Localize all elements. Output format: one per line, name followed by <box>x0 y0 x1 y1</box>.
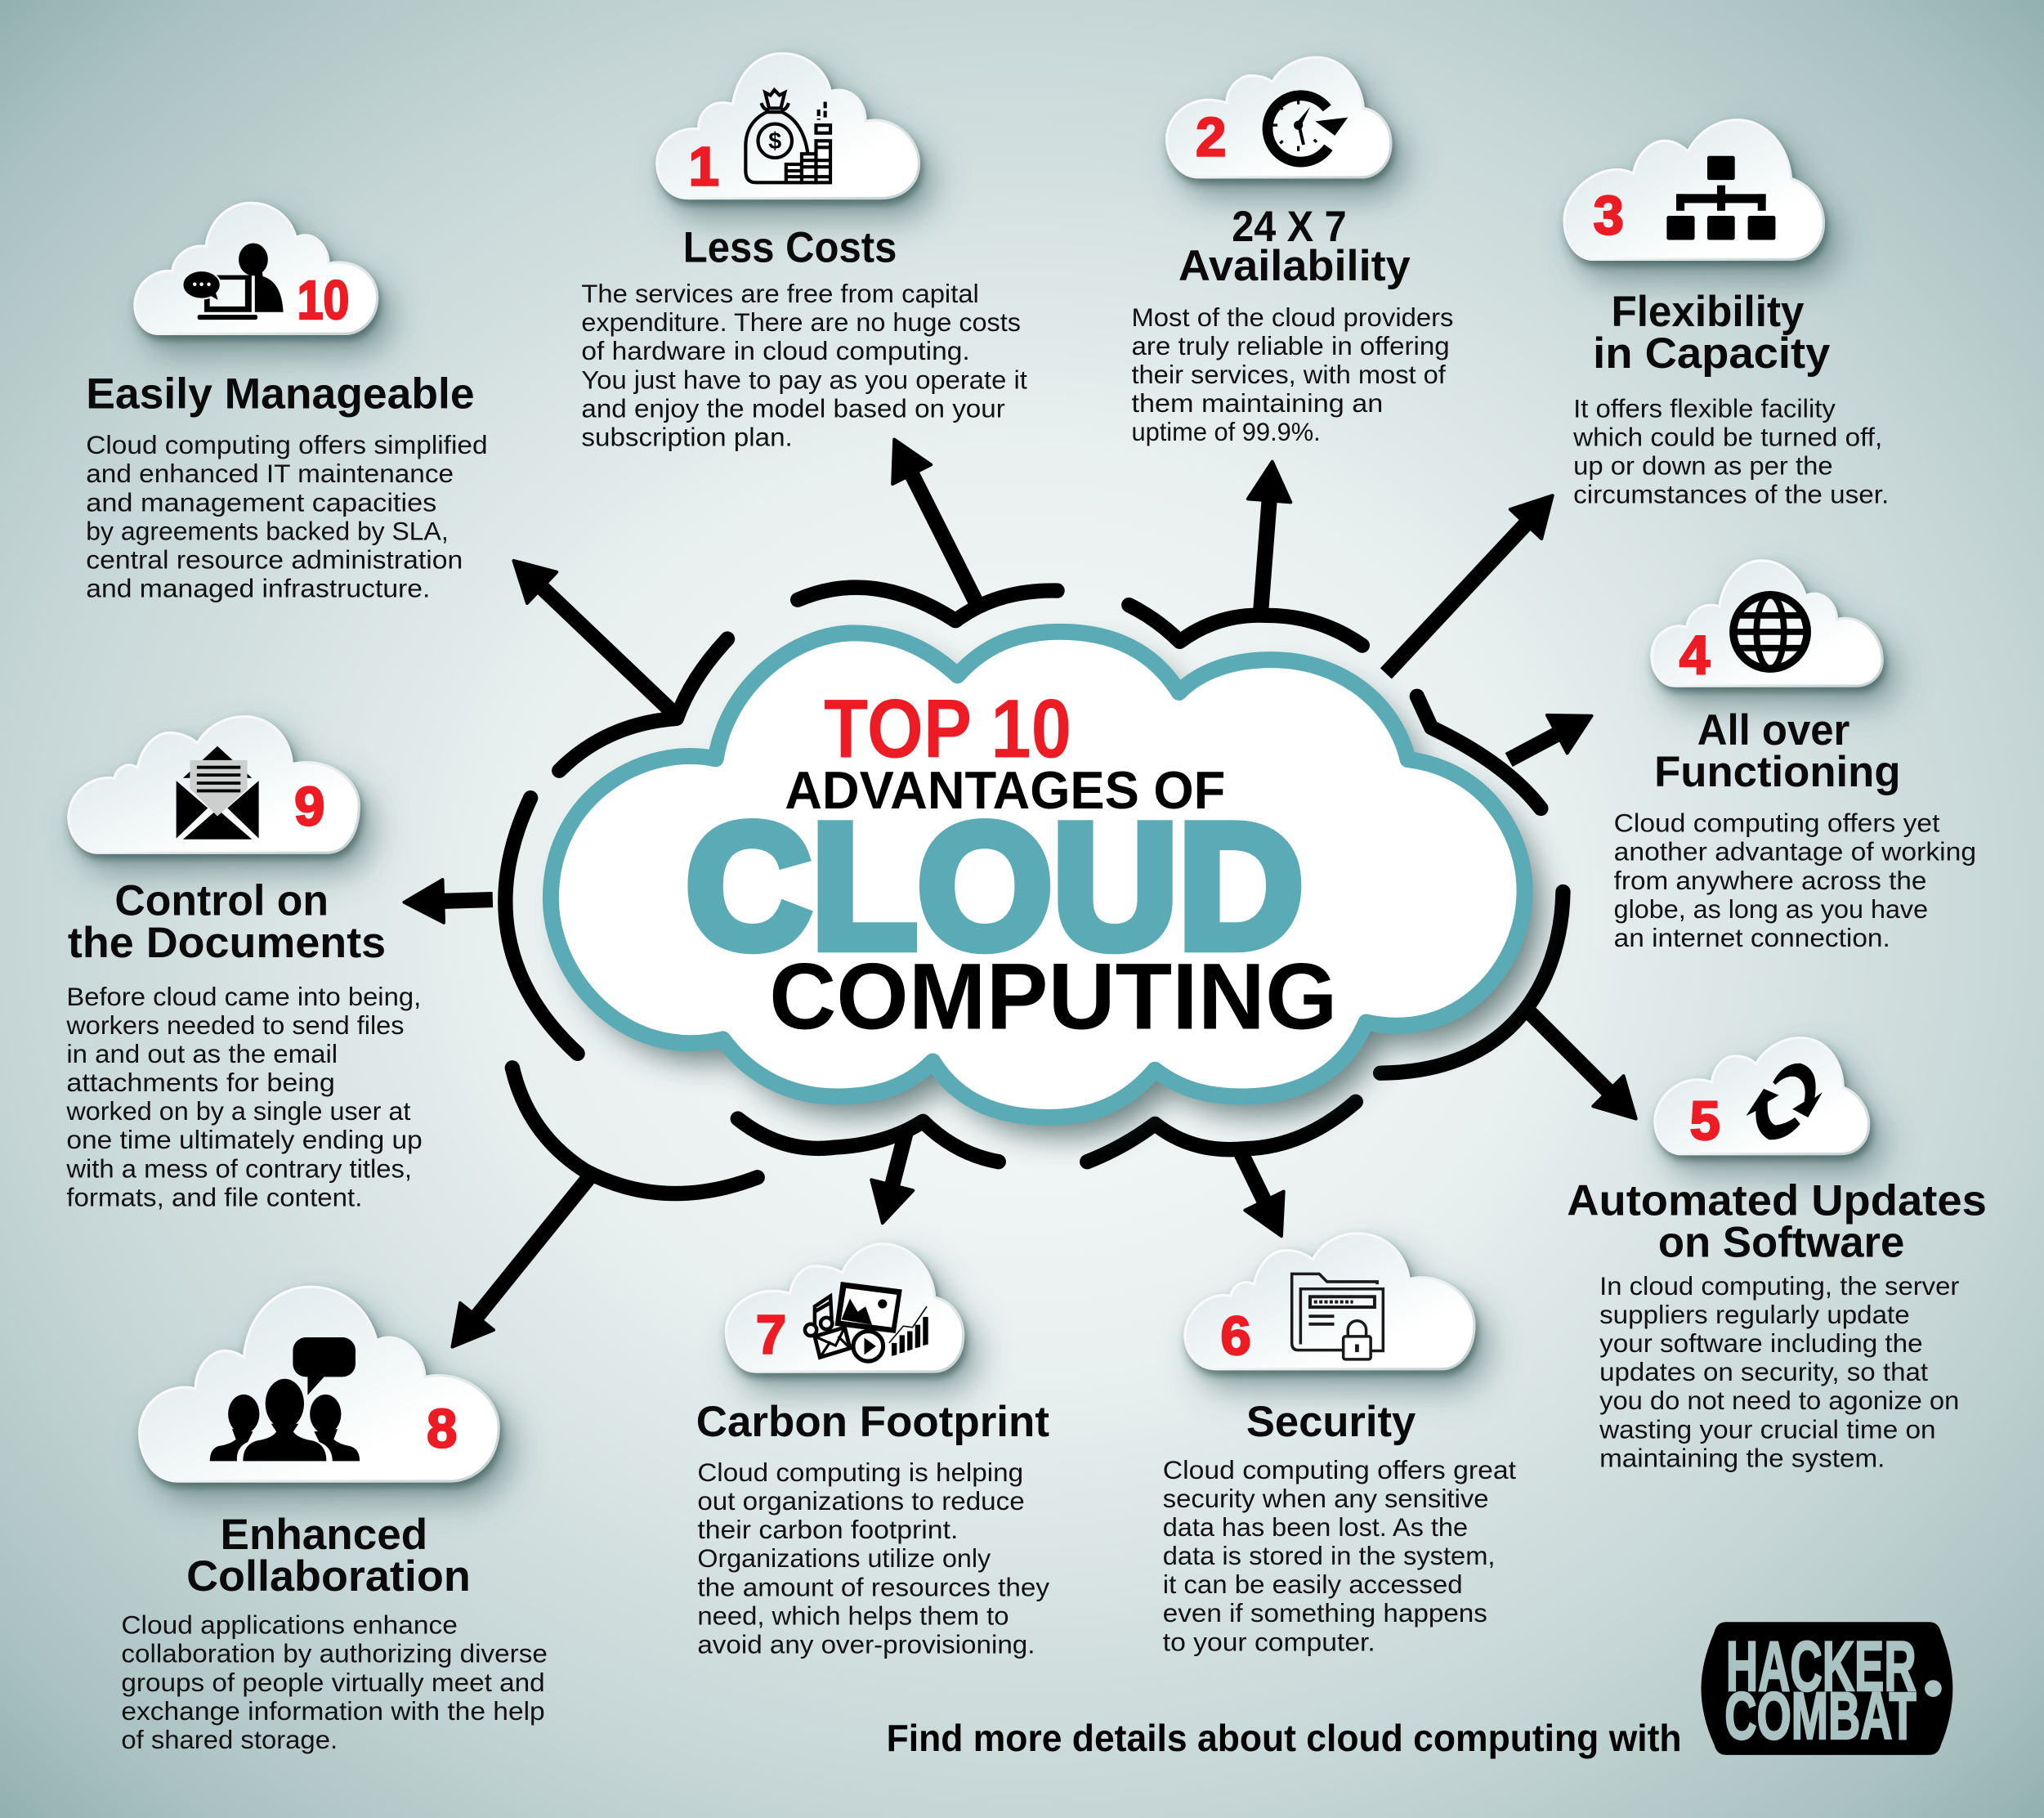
body text: You just have to pay as you operate it <box>581 365 1027 394</box>
body text: data is stored in the system, <box>1163 1541 1495 1570</box>
panel 6: Security <box>1163 1234 1516 1656</box>
panel 9: Control on the Documents <box>65 717 423 1211</box>
icon: money bag and coins <box>745 90 830 182</box>
body text: of shared storage. <box>121 1725 338 1754</box>
panel 3: Flexibility in Capacity <box>1564 120 1889 509</box>
body text: Cloud computing offers simplified <box>86 430 488 459</box>
number 4: 4 <box>1679 625 1710 687</box>
body text: and enhanced IT maintenance <box>86 459 454 488</box>
number 8: 8 <box>427 1399 457 1460</box>
body text: collaboration by authorizing diverse <box>121 1639 548 1668</box>
body text: need, which helps them to <box>697 1601 1009 1630</box>
number 1: 1 <box>689 137 719 198</box>
body text: suppliers regularly update <box>1599 1300 1910 1329</box>
logo: Hacker Combat: COMBAT <box>1724 1679 1917 1753</box>
body text: circumstances of the user. <box>1573 480 1889 509</box>
arrow to 4 <box>1499 696 1602 779</box>
body text <box>65 982 423 1211</box>
body text: groups of people virtually meet and <box>121 1668 545 1697</box>
icon: media collage <box>805 1282 928 1361</box>
body text: workers needed to send files <box>65 1010 404 1040</box>
body text <box>1599 1271 1960 1472</box>
heading <box>1567 1177 1987 1267</box>
heading: Less Costs <box>683 224 897 272</box>
title: top 10: TOP 10 <box>824 683 1071 776</box>
footer text: Find more details about cloud computing with <box>887 1717 1682 1759</box>
icon: folder with lock <box>1292 1274 1383 1359</box>
body text: exchange information with the help <box>121 1696 545 1726</box>
arrow to 2 <box>1239 460 1294 614</box>
arrow to 3 <box>1371 481 1568 688</box>
body text: it can be easily accessed <box>1163 1569 1463 1599</box>
body text: from anywhere across the <box>1614 866 1926 895</box>
arc right upper <box>1417 696 1541 808</box>
heading: Control on <box>114 877 329 925</box>
body text <box>581 279 1027 452</box>
panel 8: Enhanced Collaboration <box>121 1287 548 1754</box>
title <box>686 683 1337 1050</box>
body text: Cloud applications enhance <box>121 1610 458 1640</box>
body text: which could be turned off, <box>1572 423 1882 452</box>
body text: maintaining the system. <box>1599 1443 1885 1472</box>
body text <box>1163 1455 1516 1656</box>
icon: hierarchy <box>1666 156 1775 240</box>
heading: 24 X 7 <box>1232 203 1347 251</box>
heading: Enhanced <box>221 1511 427 1559</box>
icon: group with speech bubble <box>210 1337 360 1461</box>
body text: formats, and file content. <box>66 1182 362 1211</box>
panel 10: Easily Manageable <box>86 203 488 603</box>
heading: Collaboration <box>186 1552 471 1601</box>
cloud badge 1 <box>657 53 919 198</box>
body text: wasting your crucial time on <box>1599 1414 1936 1444</box>
body text: security when any sensitive <box>1163 1484 1489 1513</box>
body text: with a mess of contrary titles, <box>65 1153 412 1183</box>
body text: you do not need to agonize on <box>1599 1386 1959 1415</box>
body text: central resource administration <box>86 544 463 574</box>
icon: clock with arrow <box>1268 96 1348 162</box>
central cloud <box>551 632 1525 1117</box>
arrow to 9 <box>404 878 494 924</box>
body text <box>1614 808 1976 952</box>
body text: of hardware in cloud computing. <box>581 336 970 365</box>
heading: Carbon Footprint <box>696 1398 1049 1446</box>
body text: Cloud computing is helping <box>697 1458 1023 1487</box>
number 7: 7 <box>756 1305 786 1366</box>
central cloud bracket arcs and arrows <box>404 430 1651 1360</box>
icon: open envelope <box>177 746 259 840</box>
body text: the amount of resources they <box>697 1572 1049 1601</box>
body text <box>697 1458 1049 1659</box>
icon: globe <box>1733 595 1807 669</box>
heading: All over <box>1697 706 1849 755</box>
body text: to your computer. <box>1163 1627 1375 1656</box>
cloud badge 3 <box>1564 120 1823 259</box>
body text: Organizations utilize only <box>697 1543 991 1573</box>
body text: their carbon footprint. <box>697 1515 958 1544</box>
number 3: 3 <box>1594 185 1624 246</box>
body text <box>121 1610 548 1754</box>
arrow to 1 <box>875 430 1000 620</box>
body text <box>86 430 488 603</box>
number 9: 9 <box>294 777 324 838</box>
panel 7: Carbon Footprint <box>696 1244 1049 1659</box>
cloud badge 2 <box>1167 57 1391 177</box>
body text: in and out as the email <box>66 1039 338 1068</box>
body text: subscription plan. <box>581 423 793 452</box>
number 10: 10 <box>297 270 349 331</box>
body text: an internet connection. <box>1614 923 1890 952</box>
heading <box>1179 203 1411 290</box>
number 2: 2 <box>1196 107 1226 168</box>
heading: the Documents <box>68 919 386 967</box>
body text: up or down as per the <box>1573 451 1833 481</box>
heading <box>186 1511 471 1601</box>
heading: Automated Updates <box>1567 1177 1987 1225</box>
central cloud shadow <box>566 650 1541 1135</box>
body text: Cloud computing offers yet <box>1614 808 1940 838</box>
heading: Security <box>1246 1398 1416 1446</box>
logo: Hacker Combat: HACKER <box>1726 1628 1917 1706</box>
arc bottom right <box>1087 1102 1356 1162</box>
body text: attachments for being <box>66 1068 335 1097</box>
panel 4: All over Functioning <box>1614 561 1976 952</box>
heading: Flexibility <box>1611 288 1805 336</box>
heading <box>68 877 386 967</box>
arc top right <box>1129 605 1362 646</box>
cloud badge 5 <box>1655 1038 1869 1154</box>
icon: person at laptop with chat bubble <box>182 244 284 320</box>
body text: globe, as long as you have <box>1614 894 1928 924</box>
panel 1: Less Costs <box>581 53 1027 452</box>
body text: In cloud computing, the server <box>1599 1271 1960 1301</box>
heading: in Capacity <box>1593 329 1830 378</box>
body text: updates on security, so that <box>1599 1357 1928 1386</box>
body text: Cloud computing offers great <box>1163 1455 1516 1484</box>
arrow to 10 <box>499 545 693 732</box>
title: computing: COMPUTING <box>769 945 1337 1050</box>
panel 2: 24 X 7 Availability <box>1131 57 1453 446</box>
heading: Easily Manageable <box>86 369 475 418</box>
body text: It offers flexible facility <box>1573 393 1836 423</box>
title: advantages of: ADVANTAGES OF <box>785 760 1225 820</box>
body text: avoid any over-provisioning. <box>697 1630 1035 1659</box>
title: cloud: CLOUD <box>686 787 1304 985</box>
body text: and managed infrastructure. <box>86 574 430 603</box>
body text: their services, with most of <box>1131 360 1446 389</box>
arc top left <box>559 639 727 771</box>
icon: refresh arrows <box>1747 1063 1823 1140</box>
body text: one time ultimately ending up <box>66 1125 423 1154</box>
cloud badge 7 <box>726 1244 964 1372</box>
number 5: 5 <box>1690 1090 1720 1152</box>
body text: and enjoy the model based on your <box>581 393 1005 423</box>
body text: and management capacities <box>86 487 436 517</box>
body text: Most of the cloud providers <box>1131 302 1453 332</box>
arrow to 5 <box>1513 996 1651 1134</box>
body text: by agreements backed by SLA, <box>86 516 449 545</box>
body text: data has been lost. As the <box>1163 1512 1468 1542</box>
body text <box>1131 302 1453 446</box>
arc bottom center <box>738 1119 999 1162</box>
icon: money bag and coins: $ <box>768 128 781 154</box>
body text <box>1572 393 1889 509</box>
heading <box>1654 706 1901 796</box>
heading <box>1593 288 1830 378</box>
arc left <box>505 798 578 1054</box>
body text: The services are free from capital <box>581 279 979 308</box>
logo: Hacker Combat <box>1702 1622 1952 1755</box>
cloud badge 4 <box>1652 561 1882 686</box>
cloud badge 9 <box>69 717 359 853</box>
body text: are truly reliable in offering <box>1131 331 1450 360</box>
panel 5: Automated Updates on Software <box>1567 1038 1987 1472</box>
arc bottom left <box>512 1068 758 1193</box>
cloud badge 8 <box>140 1287 499 1481</box>
arc right lower <box>1380 892 1563 1073</box>
body text: worked on by a single user at <box>65 1096 411 1126</box>
body text: Before cloud came into being, <box>66 982 421 1011</box>
arrow to 6 <box>1219 1138 1301 1246</box>
body text: your software including the <box>1599 1328 1923 1358</box>
arrow to 8 <box>436 1157 611 1360</box>
arrow to 7 <box>861 1126 927 1229</box>
cloud badge 6 <box>1185 1234 1474 1369</box>
cloud badge 10 <box>135 203 378 334</box>
body text: another advantage of working <box>1614 837 1976 866</box>
arc top <box>798 588 1058 620</box>
heading: Functioning <box>1654 748 1901 796</box>
body text: out organizations to reduce <box>697 1486 1025 1516</box>
body text: them maintaining an <box>1131 388 1383 418</box>
heading: Availability <box>1179 242 1411 290</box>
body text: uptime of 99.9%. <box>1131 417 1321 446</box>
body text: even if something happens <box>1163 1598 1487 1628</box>
heading: on Software <box>1658 1219 1904 1267</box>
body text: expenditure. There are no huge costs <box>581 307 1021 337</box>
number 6: 6 <box>1220 1305 1251 1367</box>
